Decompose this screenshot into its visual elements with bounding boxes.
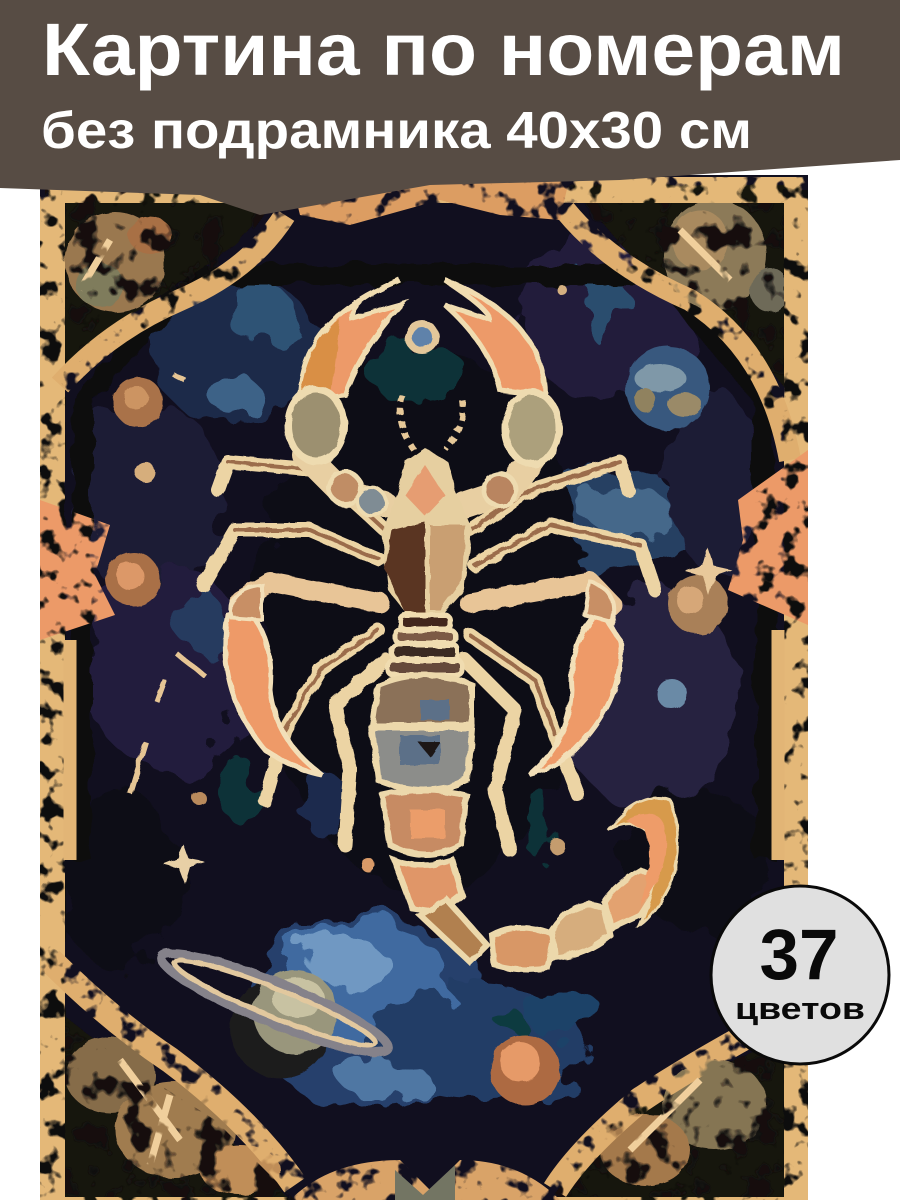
border underlay [52,190,797,1200]
badge: 37 colours: 37 [760,916,838,995]
black frame band [82,275,765,860]
title: Картина по номерам [42,8,845,91]
bottom centre ornament [395,1165,455,1200]
corner medallions [45,185,805,1200]
badge: 37 colours [711,886,889,1064]
lower nebula [245,915,605,1105]
lower claws [225,610,322,775]
ornate border [40,175,808,1200]
nebula clouds [75,240,765,810]
legs [203,455,655,850]
painting [40,175,808,1200]
planets and stars [106,285,732,1105]
subtitle: без подрамника 40х30 см [41,102,752,160]
abdomen [372,675,662,969]
scorpion [203,280,678,969]
badge: 37 colours: цветов [735,991,865,1026]
upper claws [300,280,402,400]
cephalothorax [382,448,472,618]
saturn [154,939,396,1078]
lower arms [240,582,380,603]
stinger [608,798,678,925]
dark halo behind scorpion [60,347,770,970]
header banner [0,0,900,215]
waist [388,615,462,675]
corner dark veins [45,180,805,1200]
antennae [400,395,463,450]
upper arms [305,455,385,505]
